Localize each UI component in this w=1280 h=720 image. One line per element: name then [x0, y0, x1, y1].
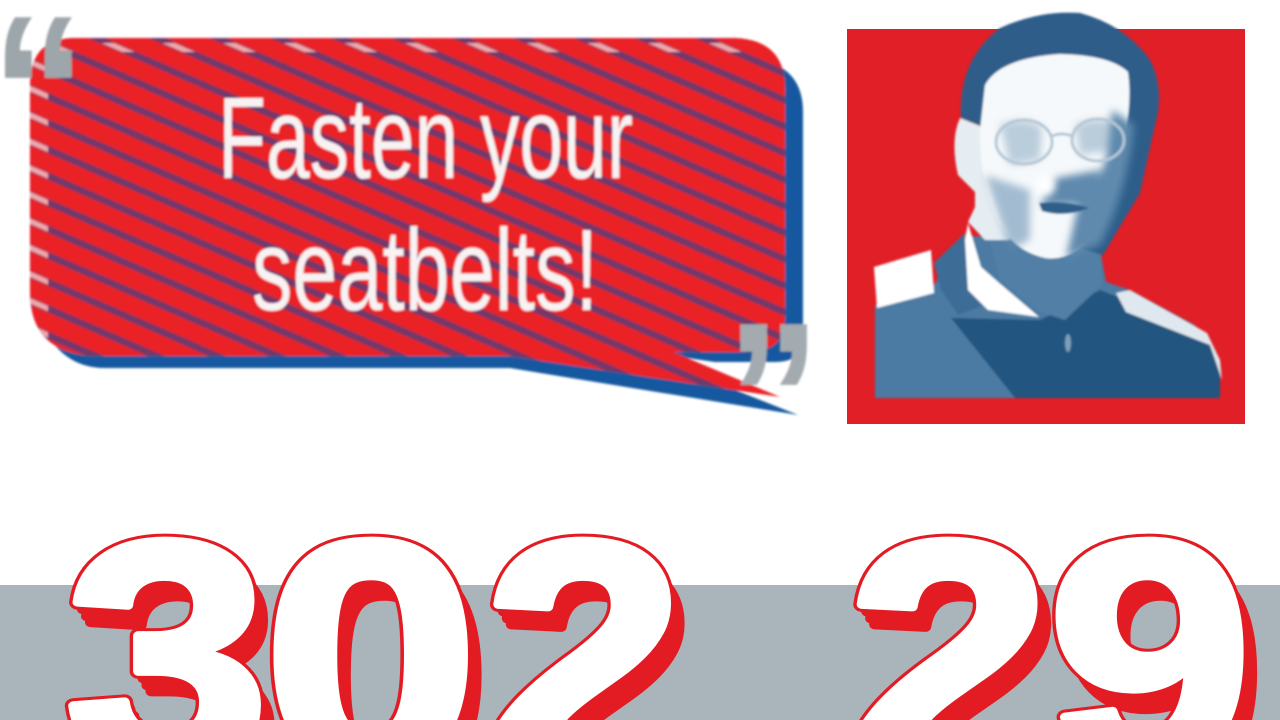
speech bubble: [4, 16, 808, 416]
hair: [961, 13, 1159, 255]
neck: [985, 225, 1102, 320]
quote text: [218, 73, 633, 335]
nose highlight: [1037, 177, 1055, 195]
portrait panel: [847, 13, 1245, 424]
shirt button: [1065, 334, 1071, 352]
bubble blue shadow: [40, 60, 803, 415]
quote text: Fasten your: [218, 73, 633, 203]
ear and jaw: [954, 118, 1010, 240]
grey background band: [0, 585, 1280, 720]
collar: [965, 223, 1039, 317]
face base: [980, 54, 1129, 259]
left white shoulder: [874, 250, 934, 308]
right white shoulder: [1116, 290, 1222, 380]
number 29: [847, 475, 1252, 720]
face shading: [985, 110, 1134, 258]
quote text: seatbelts!: [252, 205, 598, 335]
mouth: [1039, 202, 1089, 214]
closing quotation mark: ”: [726, 277, 821, 518]
bubble red body with stripes: [20, 30, 800, 410]
big numbers: [64, 475, 1265, 720]
red extruded digit shadow: [70, 482, 1265, 720]
dark hood by collar: [934, 233, 985, 315]
portrait illustration of man: [874, 13, 1222, 398]
glasses: [996, 119, 1124, 164]
number 302: [65, 475, 684, 720]
sweater body: [875, 235, 1220, 398]
red portrait background: [847, 29, 1245, 424]
